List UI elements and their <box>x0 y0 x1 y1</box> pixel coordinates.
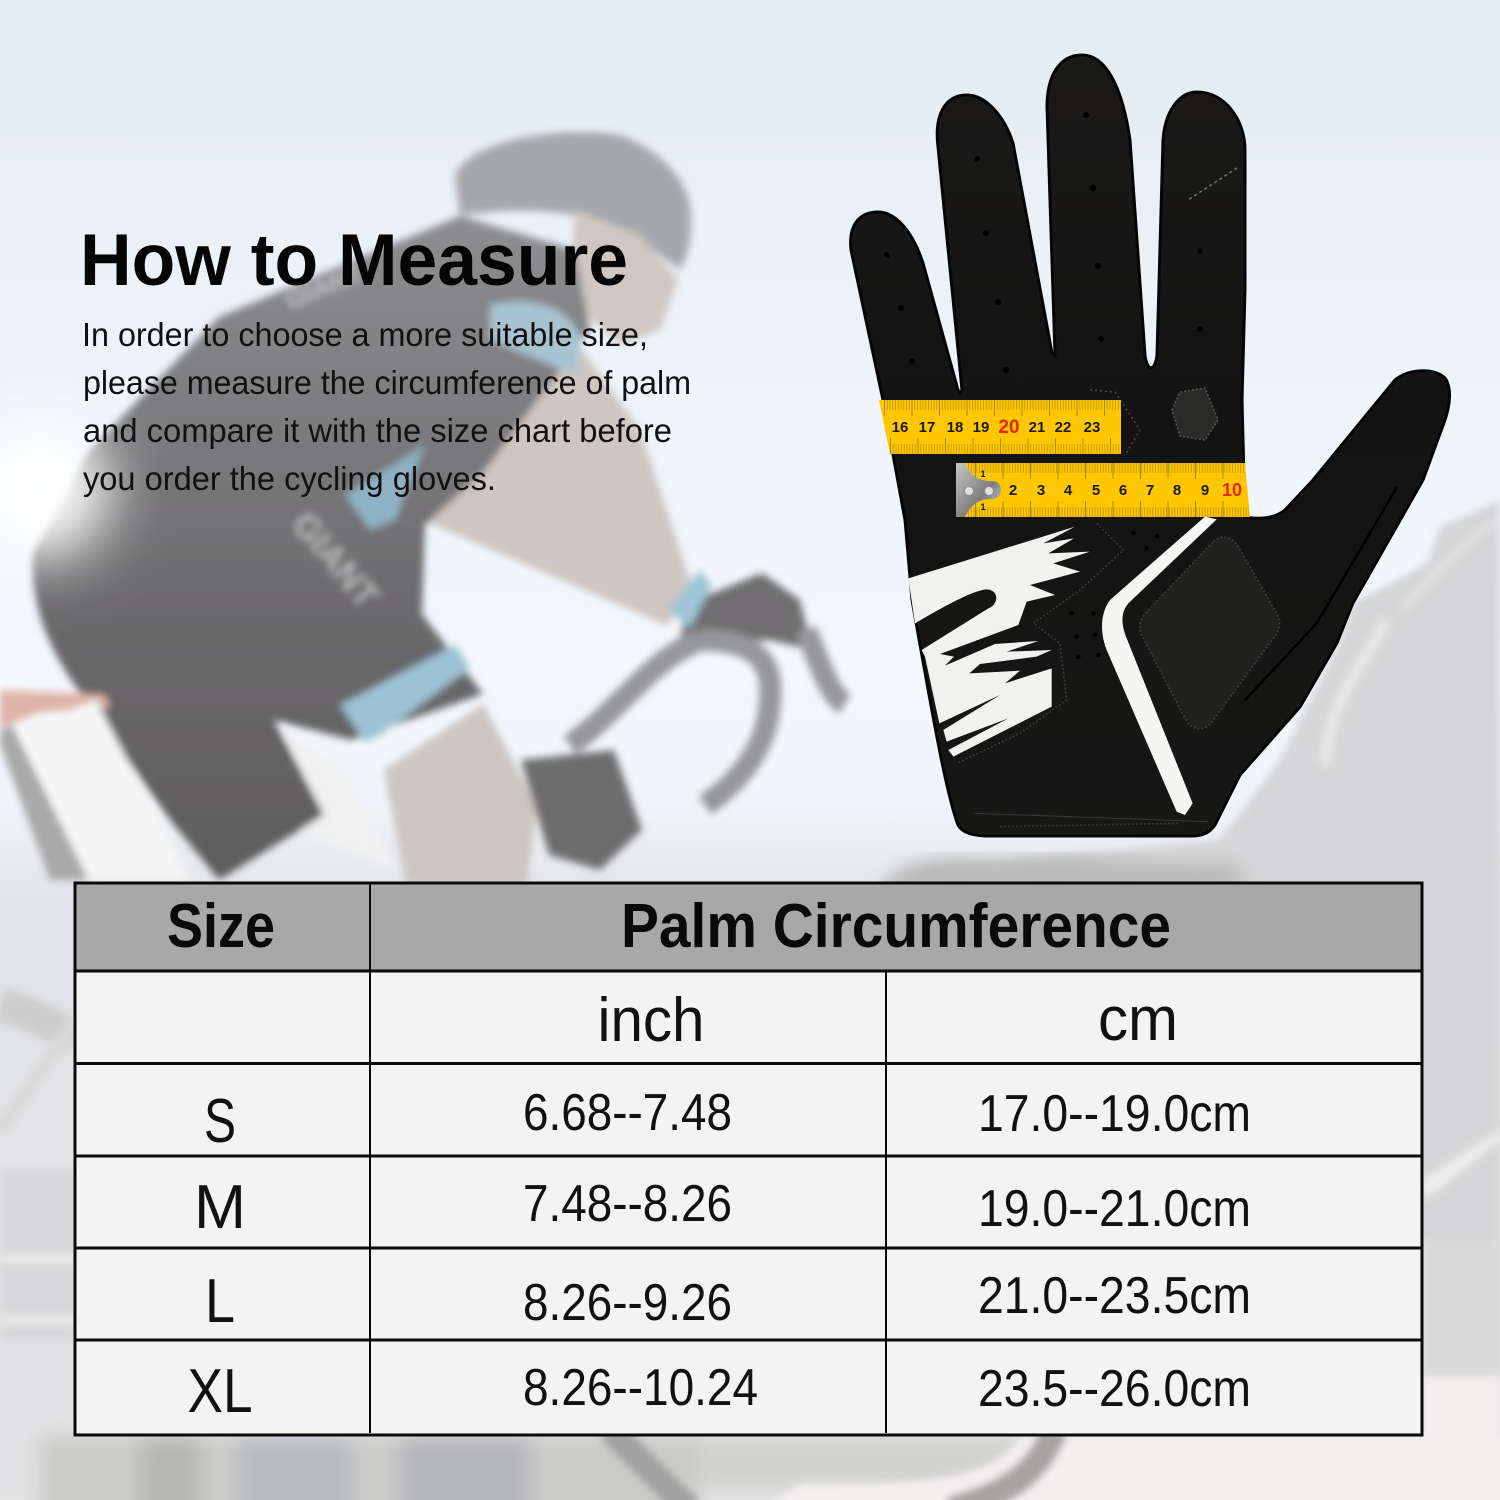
row: L: 21.0--23.5cm <box>978 1267 1251 1325</box>
header: Size: Size <box>167 892 275 961</box>
row: M: 7.48--8.26 <box>523 1175 732 1233</box>
measuring tape: upper section 16-23 <box>879 400 1121 454</box>
cyclist <box>0 132 845 886</box>
finger perforations <box>884 112 1203 373</box>
measuring tape: lower section 1-10: 2 <box>1009 482 1017 499</box>
sub-header units: inch <box>598 986 704 1055</box>
measuring tape: upper section 16-23: 16 <box>892 419 908 436</box>
shoulder sleeve <box>490 301 582 375</box>
index finger stitching <box>1188 168 1237 200</box>
rear wheel and road texture <box>0 1005 76 1500</box>
glove illustration <box>851 55 1450 836</box>
table header band <box>75 883 1422 971</box>
handlebar <box>570 630 845 805</box>
distant trees <box>885 858 1240 890</box>
white brush stroke logo <box>908 527 1090 757</box>
face and neck <box>570 210 678 345</box>
measuring tape: lower section 1-10: 7 <box>1146 482 1154 499</box>
mountain on the right <box>880 500 1500 1500</box>
measuring tape: upper section 16-23: 21 <box>1029 419 1045 436</box>
upper hand glove <box>680 573 812 650</box>
side panel of jersey <box>345 445 425 530</box>
measuring tape: upper section 16-23: 18 <box>947 419 963 436</box>
row: S: 17.0--19.0cm <box>978 1085 1251 1143</box>
shorts blue band <box>340 645 470 742</box>
white palm graphic <box>908 517 1280 827</box>
measuring tape: lower section 1-10: 3 <box>1037 482 1045 499</box>
GIANT lettering on jersey: GIANT <box>281 257 367 316</box>
table body <box>75 971 1422 1435</box>
row: L: 8.26--9.26 <box>523 1274 732 1332</box>
intro paragraph: please measure the circumference of palm <box>83 364 691 401</box>
seat tube <box>0 725 88 880</box>
glove silhouette <box>851 55 1450 836</box>
row: S: S <box>204 1087 236 1156</box>
measuring tape: upper section 16-23: 20 <box>998 417 1020 438</box>
sub-header units <box>598 985 1178 1055</box>
knuckle pad <box>1172 388 1218 440</box>
helmet <box>455 132 691 270</box>
measuring tape: lower section 1-10: 6 <box>1119 482 1127 499</box>
palm dark stitching <box>957 523 1123 763</box>
curved white stripe <box>1102 517 1217 815</box>
thumb seam <box>1245 487 1397 700</box>
row: XL: 23.5--26.0cm <box>978 1360 1251 1418</box>
row: M: 19.0--21.0cm <box>978 1180 1251 1238</box>
row: S: 6.68--7.48 <box>523 1084 732 1142</box>
row: M: M <box>194 1173 246 1242</box>
intro paragraph: you order the cycling gloves. <box>83 460 496 497</box>
tape metal hook <box>956 463 1001 517</box>
row: XL: 8.26--10.24 <box>523 1359 758 1417</box>
measuring tape: lower section 1-10: 8 <box>1173 482 1181 499</box>
white gap by leg <box>280 725 395 870</box>
measuring tape: lower section 1-10: 1 <box>980 502 986 512</box>
saddle <box>0 690 110 728</box>
sun flare <box>0 420 110 560</box>
lower hand <box>521 750 642 870</box>
GIANT lettering on jersey <box>281 257 387 616</box>
row: M <box>194 1173 1251 1242</box>
measuring tape: lower section 1-10 <box>956 463 1250 517</box>
intro paragraph <box>82 316 691 497</box>
row: L: L <box>205 1267 235 1336</box>
arm <box>422 345 690 626</box>
row: XL <box>188 1357 1251 1426</box>
jersey <box>33 216 590 880</box>
near leg <box>384 704 537 886</box>
measuring tape: lower section 1-10: 9 <box>1201 482 1209 499</box>
intro paragraph: In order to choose a more suitable size, <box>82 316 648 353</box>
measuring tape: upper section 16-23: 17 <box>919 419 935 436</box>
measuring tape: lower section 1-10: 1 <box>980 469 986 479</box>
row: S <box>204 1084 1251 1156</box>
row: L <box>205 1267 1251 1336</box>
cuff seam <box>975 813 1208 822</box>
measuring tape: lower section 1-10: 5 <box>1092 482 1100 499</box>
measuring tape: lower section 1-10: 4 <box>1064 482 1073 499</box>
sub-header units: cm <box>1098 985 1178 1054</box>
intro paragraph: and compare it with the size chart before <box>83 412 672 449</box>
measuring tape: upper section 16-23: 19 <box>973 419 989 436</box>
size chart table <box>75 883 1422 1435</box>
measuring tape: upper section 16-23: 22 <box>1055 419 1071 436</box>
GIANT lettering on jersey: GIANT <box>284 504 387 616</box>
header: Palm Circumference: Palm Circumference <box>621 892 1171 961</box>
palm stitching <box>1090 390 1140 455</box>
row: XL: XL <box>188 1357 252 1426</box>
heading: How to Measure: How to Measure <box>80 220 628 301</box>
measuring tape: lower section 1-10: 10 <box>1222 480 1242 500</box>
measuring tape: upper section 16-23: 23 <box>1084 419 1100 436</box>
diamond palm pad <box>1140 537 1280 729</box>
